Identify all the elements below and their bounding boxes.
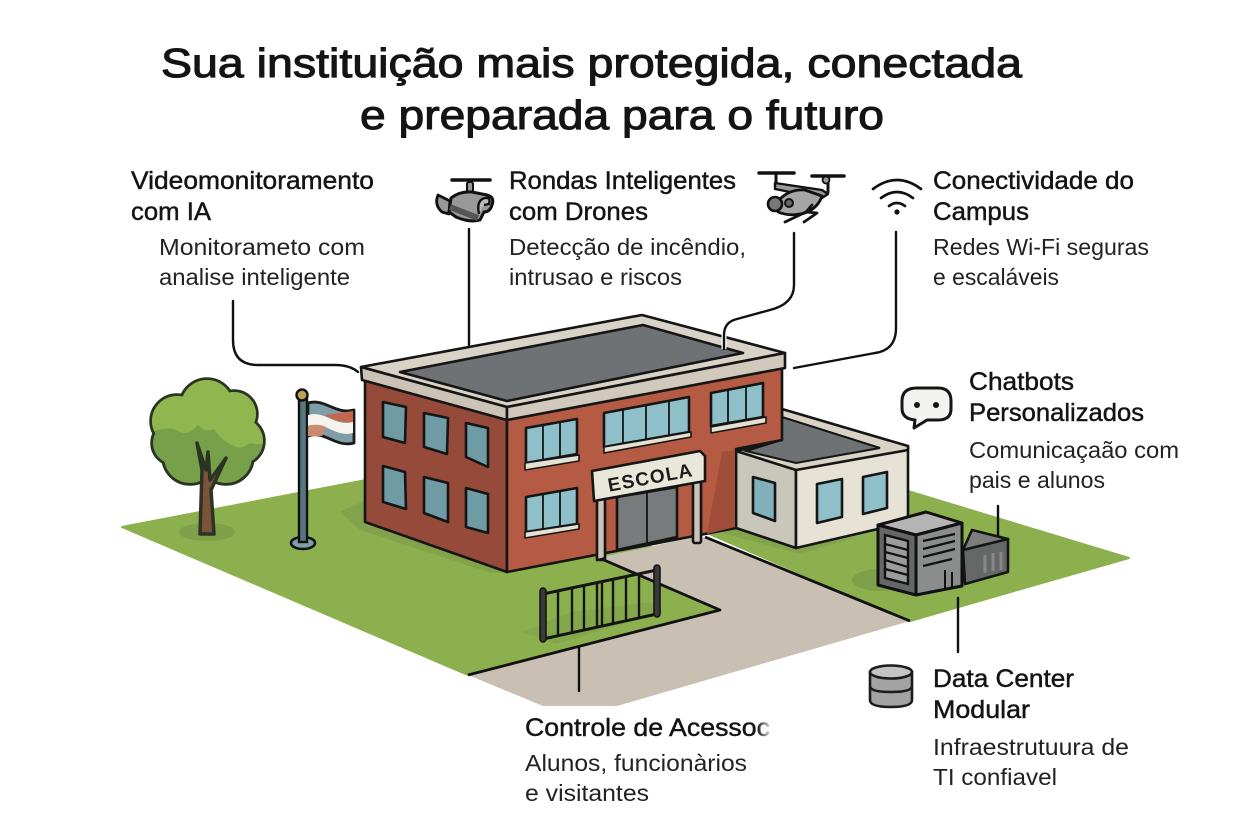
text block: chatbots: Comunicaçaão com	[969, 437, 1179, 463]
leader line: drone	[724, 233, 794, 349]
school sign: ESCOLA	[606, 460, 695, 497]
walkway	[468, 536, 910, 706]
main unit	[878, 512, 962, 595]
leader line: data center	[957, 598, 959, 652]
annex	[736, 409, 908, 548]
icon: database	[870, 666, 912, 707]
gate shadow	[522, 602, 664, 644]
text block: video monitoring: analise inteligente	[159, 264, 350, 290]
annex shadow	[722, 528, 860, 554]
front wall windows	[525, 383, 766, 538]
icon: security camera	[437, 180, 493, 221]
server shadow	[852, 569, 908, 591]
text block: drone rounds: com Drones	[509, 198, 648, 226]
leader line: connectivity	[794, 232, 896, 368]
leader line: video monitoring	[233, 301, 358, 372]
left lawn	[122, 480, 720, 675]
text block: data center: Data Center	[933, 665, 1074, 693]
icon: flag on pole	[291, 390, 354, 549]
icon: wifi	[873, 180, 921, 215]
text block: chatbots	[969, 368, 1179, 493]
text block: access control: Alunos, funcionàrios	[525, 750, 747, 776]
title: e preparada para o futuro	[360, 92, 884, 138]
left wall	[365, 380, 507, 572]
text block: chatbots: Personalizados	[969, 399, 1144, 427]
title: Sua instituição mais protegida, conectada	[161, 40, 1022, 86]
leader line: access control	[578, 648, 580, 691]
icon: chat bubble	[902, 388, 951, 428]
walkway edge at front corner	[597, 558, 605, 560]
title	[161, 40, 1022, 138]
icon: drone	[759, 173, 844, 222]
text block: video monitoring: com IA	[131, 198, 211, 226]
text block: video monitoring: Videomonitoramento	[131, 167, 374, 195]
entrance door	[617, 487, 677, 550]
building shadow	[340, 500, 507, 573]
leader line: chatbots	[997, 506, 999, 537]
school sign	[592, 451, 705, 501]
text block: data center	[933, 665, 1129, 790]
text block: drone rounds: Rondas Inteligentes	[509, 167, 736, 195]
text block: campus connectivity: Conectividade do	[933, 167, 1134, 195]
text block: campus connectivity: Redes Wi-Fi seguras	[933, 234, 1149, 260]
text block: data center: TI confiavel	[933, 764, 1057, 790]
text block: campus connectivity	[933, 167, 1149, 290]
text block: campus connectivity: Campus	[933, 198, 1029, 226]
text block: data center: Infraestrutuura de	[933, 734, 1129, 760]
leader line: drones rounds	[468, 229, 470, 346]
text block: drone rounds: Detecção de incêndio,	[509, 234, 746, 260]
entrance columns	[597, 482, 701, 560]
icon: modular data center	[878, 512, 1008, 595]
text block: chatbots: pais e alunos	[969, 467, 1105, 493]
text block: data center: Modular	[933, 696, 1030, 724]
text block: drone rounds: intrusao e riscos	[509, 264, 682, 290]
text block: drone rounds	[509, 167, 746, 290]
icon: tree	[149, 377, 266, 541]
text block: campus connectivity: e escaláveis	[933, 264, 1059, 290]
leader line: drone halo	[724, 285, 794, 349]
icon: gate	[540, 565, 660, 642]
text block: video monitoring	[131, 167, 374, 290]
school building	[361, 315, 908, 572]
text block: access control: Controle de Acessoc	[525, 714, 770, 742]
front wall	[507, 366, 782, 572]
left wall windows	[383, 402, 488, 533]
small unit	[963, 530, 1008, 584]
text block: chatbots: Chatbots	[969, 368, 1074, 396]
text block: video monitoring: Monitorameto com	[159, 234, 365, 260]
text block: access control	[525, 712, 773, 806]
right lawn	[700, 491, 1129, 621]
text block: access control: e visitantes	[525, 780, 649, 806]
ground: lawn and walkway	[122, 480, 1129, 706]
roof	[361, 315, 785, 420]
